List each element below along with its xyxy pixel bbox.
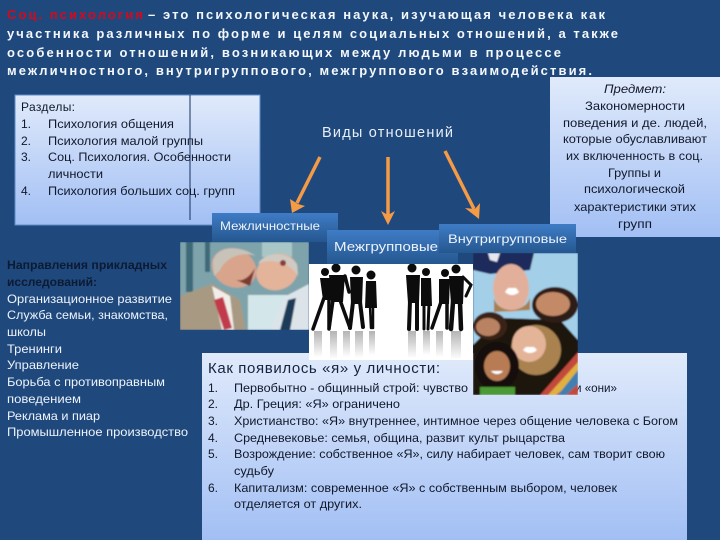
label box: межличностные: Межличностные [220,219,320,233]
panel: разделы: 4. [21,184,31,198]
panel: разделы: 1. [21,117,31,131]
panel: предмет: характеристики этих [574,200,696,214]
panel: разделы: Соц. Психология. Особенности [48,150,231,164]
panel: разделы: Психология общения [48,117,174,131]
text block: направления прикладных исследований [7,258,188,439]
text block: направления прикладных исследований: школы [7,325,46,339]
panel: разделы: Разделы: [21,100,75,114]
panel: как появилось я: Др. Греция: «Я» ограничено [234,397,400,411]
panel: предмет: которые обуславливают [563,132,708,146]
panel: предмет: их включенность в соц. [566,149,703,163]
panel: как появилось я: Средневековье: семья, община, развит культ рыцарства [234,431,565,445]
heading: виды отношений: Виды отношений [322,125,453,141]
photo: silhouettes of two groups [309,264,473,360]
text block: направления прикладных исследований: Тренинги [7,342,62,356]
text block: направления прикладных исследований: Организационное развитие [7,292,172,306]
panel: как появилось я: Возрождение: собственное «Я», силу набирает человек, сам творит свою [234,447,665,461]
photo: friends in a circle looking down [473,253,578,395]
text block: направления прикладных исследований: Управление [7,358,79,372]
title definition text: участника различных по форме и целям социальных отношений, а также [7,26,618,41]
panel: как появилось я: судьбу [234,464,274,478]
panel: предмет [550,77,720,237]
panel: разделы: Психология больших соц. групп [48,184,235,198]
panel: как появилось я: Христианство: «Я» внутреннее, интимное через общение человека с Богом [234,414,678,428]
panel: как появилось я: 5. [208,447,218,461]
text block: направления прикладных исследований: исследований: [7,275,97,289]
title definition text: – это психологическая наука, изучающая человека как [148,7,605,22]
panel: разделы [15,95,260,225]
panel: как появилось я: Капитализм: современное «Я» с собственным выбором, человек [234,481,618,495]
title definition text: межличностного, внутригруппового, межгруппового взаимодействия. [7,63,592,78]
text block: направления прикладных исследований: Борьба с противоправным [7,375,165,389]
title definition text: Соц. психология [7,7,143,22]
photo: two men head to head [180,241,309,330]
panel: разделы: личности [48,167,103,181]
panel: как появилось я: 6. [208,481,218,495]
panel: предмет: групп [618,217,652,231]
label box: внутригрупповые [439,224,576,253]
text block: направления прикладных исследований: Промышленное производство [7,425,188,439]
panel: как появилось я: 3. [208,414,218,428]
title definition text: особенности отношений, возникающих между людьми в процессе [7,45,561,60]
text block: направления прикладных исследований: Направления прикладных [7,258,167,272]
text block: направления прикладных исследований: поведением [7,392,81,406]
panel: предмет: Предмет: [604,82,666,96]
panel: как появилось я: Первобытно - общинный строй: чувство [234,381,468,395]
text block: направления прикладных исследований: Служба семьи, знакомства, [7,308,168,322]
panel: предмет: поведения и де. людей, [563,116,707,130]
arrow: to межличностные [290,157,320,213]
panel: разделы: Психология малой группы [48,134,203,148]
text block: направления прикладных исследований: Реклама и пиар [7,409,100,423]
panel: разделы: 2. [21,134,31,148]
panel: предмет: Закономерности [585,99,685,113]
panel: разделы: 3. [21,150,31,164]
panel: как появилось я: 1. [208,381,218,395]
arrow: to межгрупповые [381,157,395,225]
panel: как появилось я: и «они» [575,381,617,395]
heading: как появилось я: Как появилось «я» у личности: [208,360,440,377]
panel: предмет: Группы и [608,166,661,180]
label box: межличностные [212,213,338,242]
panel: как появилось я: 2. [208,397,218,411]
label box: внутригрупповые: Внутригрупповые [448,232,567,246]
panel: предмет: психологической [584,182,685,196]
panel: как появилось я: отделяется от других. [234,497,362,511]
label box: межгрупповые: Межгрупповые [334,239,438,254]
panel: как появилось я: 4. [208,431,218,445]
panel: как появилось я [202,353,687,540]
title definition text [7,7,618,78]
label box: межгрупповые [327,230,458,264]
arrow: to внутригрупповые [445,151,480,219]
